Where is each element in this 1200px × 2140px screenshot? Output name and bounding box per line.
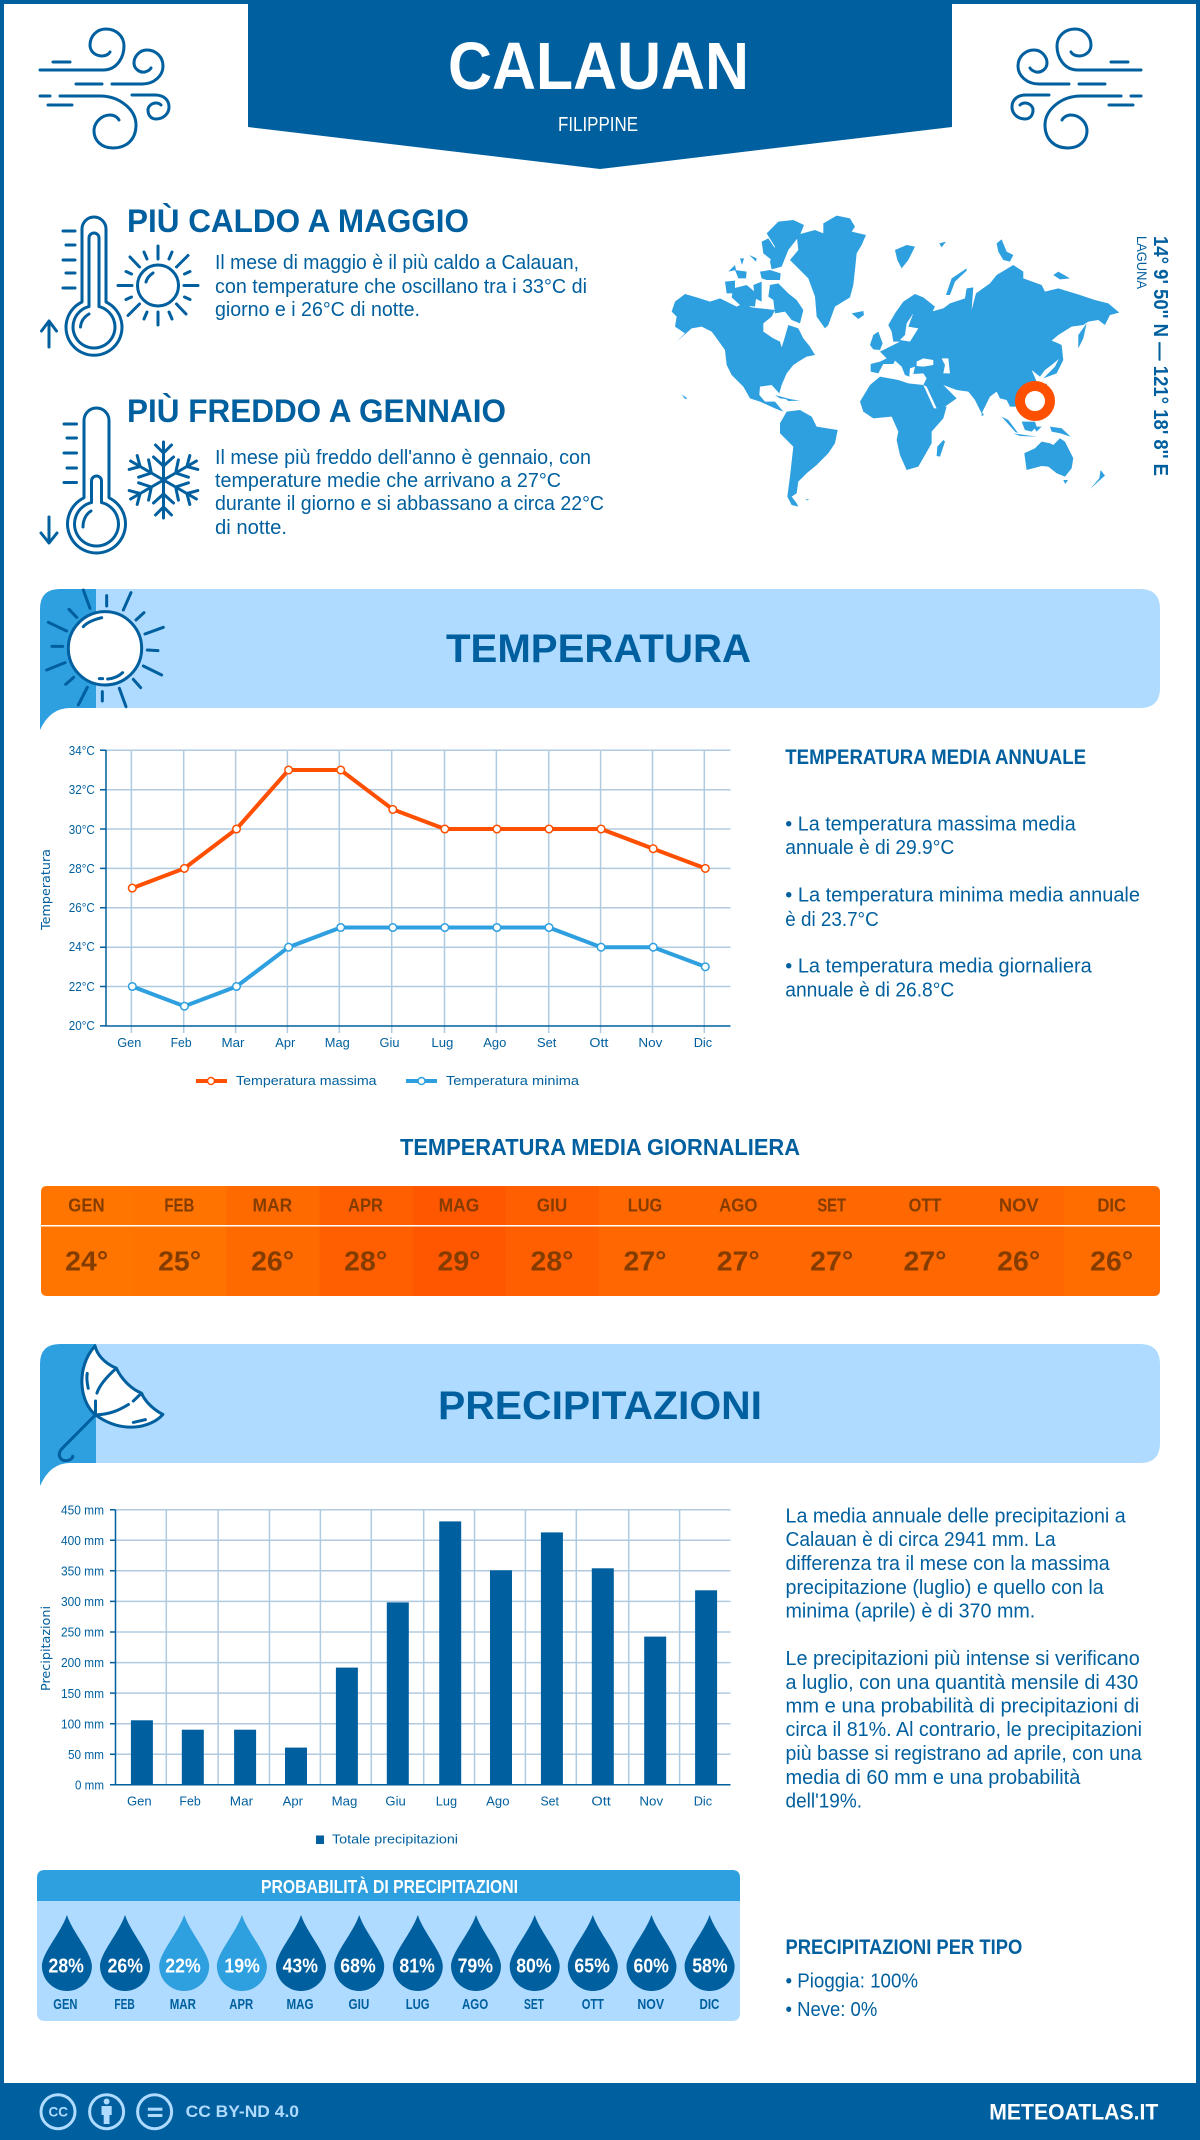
text block: precipitation description: differenza tra il mese con la massima (786, 1553, 1111, 1575)
text block: precipitation description (786, 1506, 1143, 1813)
icon: wind left (40, 29, 169, 148)
table value row: 26° (1090, 1246, 1133, 1277)
icon: creative commons: CC (48, 2104, 68, 2120)
text block: annual temperature: è di 23.7°C (785, 909, 879, 931)
probability values: 22% (165, 1956, 201, 1978)
y axis labels: 300 mm (61, 1594, 104, 1609)
text: hottest month: con temperature che oscillano tra i 33°C di (215, 276, 587, 298)
panel heading: PROBABILITÀ DI PRECIPITAZIONI (261, 1876, 518, 1897)
x axis labels: Feb (171, 1035, 192, 1050)
y axis labels: 400 mm (61, 1533, 104, 1548)
icon: cold thermometer (41, 408, 126, 553)
text block: annual temperature (785, 746, 1140, 1002)
text block: precipitation description: La media annuale delle precipitazioni a (786, 1506, 1127, 1528)
probability months: LUG (406, 1996, 430, 2013)
x axis labels: Gen (127, 1794, 152, 1808)
text: coldest month: temperature medie che arrivano a 27°C (215, 470, 561, 492)
x axis labels: Apr (283, 1794, 304, 1808)
panel: precipitation probability (37, 1870, 740, 2021)
table month row: DIC (1097, 1196, 1126, 1216)
probability values (48, 1956, 728, 1978)
table month row: AGO (719, 1196, 757, 1216)
text block: precipitation by type: • Neve: 0% (786, 1999, 877, 2021)
heading: hottest month: PIÙ CALDO A MAGGIO (127, 203, 469, 239)
x axis labels: Nov (639, 1794, 664, 1808)
probability values: 26% (108, 1956, 143, 1978)
table value row: 26° (997, 1246, 1040, 1277)
heading: temperature: TEMPERATURA (446, 627, 751, 671)
x axis labels: Mar (222, 1035, 245, 1050)
heading: precipitation by type: PRECIPITAZIONI PER TIPO (786, 1936, 1022, 1959)
bars (131, 1521, 717, 1785)
y axis labels: 50 mm (68, 1747, 104, 1762)
x axis labels: Mag (332, 1794, 357, 1808)
subtitle: FILIPPINE (558, 114, 638, 136)
icons: rain drops (42, 1915, 735, 1991)
text block: precipitation by type (786, 1936, 1022, 2021)
x axis labels: Apr (275, 1035, 296, 1050)
text block: precipitation by type: • Pioggia: 100% (786, 1970, 918, 1992)
panel: temperature header band (40, 589, 1160, 730)
table value row: 27° (810, 1246, 853, 1277)
probability values: 58% (692, 1956, 728, 1978)
chart legend: Temperatura massima (236, 1073, 377, 1088)
text block: annual temperature: • La temperatura massima media (785, 814, 1077, 836)
y axis labels: 100 mm (61, 1716, 104, 1732)
y axis labels: 250 mm (61, 1624, 104, 1640)
chart legend: Temperatura minima (446, 1073, 580, 1088)
site name: METEOATLAS.IT (989, 2099, 1159, 2124)
probability months: OTT (582, 1996, 604, 2013)
table: daily mean temperature (41, 1186, 1160, 1296)
chart legend: Totale precipitazioni (332, 1832, 458, 1846)
y axis labels: 22°C (69, 979, 95, 994)
coordinates: 14° 9' 50'' N — 121° 18' 8'' E (1149, 236, 1171, 476)
y axis labels: 28°C (69, 861, 95, 876)
x axis labels: Ago (486, 1794, 510, 1808)
x axis labels: Lug (436, 1794, 457, 1808)
table month row: MAR (253, 1196, 292, 1216)
probability values: 80% (516, 1956, 552, 1978)
probability months: GIU (348, 1996, 369, 2013)
y axis labels: 350 mm (61, 1564, 104, 1578)
table month row: SET (817, 1196, 846, 1216)
table value row (65, 1246, 1133, 1277)
world map (672, 216, 1119, 507)
x axis labels: Ago (483, 1035, 506, 1050)
x axis labels: Mag (325, 1035, 350, 1050)
probability months: APR (229, 1996, 253, 2013)
y axis labels: 24°C (69, 939, 95, 954)
x axis labels: Giu (380, 1035, 400, 1050)
y axis labels: 26°C (69, 900, 95, 915)
x axis labels: Ott (591, 1794, 611, 1808)
title: CALAUAN (448, 29, 749, 104)
icon: no derivatives (138, 2095, 172, 2129)
table month row (68, 1196, 1126, 1216)
header banner (248, 0, 952, 169)
x axis labels: Lug (431, 1035, 453, 1050)
probability months: NOV (637, 1996, 664, 2013)
probability values: 79% (458, 1956, 493, 1978)
table value row: 26° (251, 1246, 294, 1277)
icon: umbrella (59, 1346, 163, 1461)
table value row: 27° (624, 1246, 666, 1277)
y axis title: Temperatura (39, 849, 53, 931)
x axis labels: Nov (638, 1035, 663, 1050)
heading: coldest month: PIÙ FREDDO A GENNAIO (127, 393, 506, 429)
table value row: 27° (904, 1246, 946, 1277)
x axis labels (127, 1794, 713, 1808)
map marker (1020, 386, 1050, 416)
y axis labels: 0 mm (75, 1778, 104, 1792)
icon: attribution (90, 2095, 124, 2129)
table month row: LUG (628, 1196, 662, 1216)
line chart: temperature (39, 743, 730, 1088)
text block: annual temperature: • La temperatura media giornaliera (785, 956, 1093, 978)
x axis labels: Feb (179, 1794, 201, 1808)
x axis labels: Dic (694, 1035, 713, 1050)
x axis labels: Mar (230, 1794, 254, 1808)
text block: precipitation description: media di 60 mm e una probabilità (786, 1767, 1081, 1789)
table value row: 27° (717, 1246, 760, 1277)
x axis labels (117, 1035, 713, 1050)
y axis labels: 20°C (69, 1018, 95, 1033)
icon: sun (47, 590, 163, 707)
region label: LAGUNA (1134, 236, 1150, 290)
probability values: 43% (283, 1956, 318, 1978)
y axis labels: 200 mm (61, 1655, 104, 1670)
x axis labels: Giu (385, 1794, 406, 1808)
text block: annual temperature: annuale è di 26.8°C (785, 980, 954, 1002)
text block: precipitation description: precipitazione (luglio) e quello con la (786, 1577, 1105, 1599)
text block: annual temperature: annuale è di 29.9°C (785, 837, 954, 859)
text block: precipitation description: minima (aprile) è di 370 mm. (786, 1601, 1035, 1623)
table month row: NOV (999, 1196, 1039, 1216)
table value row: 28° (530, 1246, 574, 1277)
y axis labels: 450 mm (61, 1502, 104, 1518)
probability values: 19% (224, 1956, 260, 1978)
table month row: OTT (909, 1196, 941, 1216)
y axis labels: 150 mm (61, 1686, 104, 1701)
icon: snowflake (126, 442, 201, 518)
probability months: AGO (462, 1996, 488, 2013)
text block: precipitation description: Le precipitazioni più intense si verificano (786, 1648, 1140, 1670)
table value row: 25° (158, 1246, 201, 1277)
table month row: GEN (68, 1196, 105, 1216)
table month row: GIU (537, 1196, 567, 1216)
table value row: 29° (438, 1246, 480, 1277)
y axis labels: 34°C (69, 743, 95, 758)
probability values: 28% (48, 1956, 84, 1978)
probability months: DIC (700, 1996, 720, 2013)
chart legend (196, 1073, 580, 1088)
probability months: SET (524, 1996, 544, 2013)
text: coldest month: Il mese più freddo dell'anno è gennaio, con (215, 447, 591, 469)
probability months: MAG (286, 1996, 314, 2013)
x axis labels: Set (540, 1794, 559, 1808)
footer (0, 2083, 1200, 2140)
heading: daily mean temperature: TEMPERATURA MEDIA GIORNALIERA (400, 1134, 800, 1160)
table value row: 28° (344, 1246, 387, 1277)
series: minimum temperature (128, 924, 709, 1010)
probability months: FEB (114, 1996, 135, 2013)
x axis labels: Ott (589, 1035, 609, 1050)
text: hottest month: giorno e i 26°C di notte. (215, 299, 420, 321)
probability values: 68% (340, 1956, 376, 1978)
y axis labels: 30°C (69, 822, 95, 837)
text block: precipitation description: più basse si registrano ad aprile, con una (786, 1743, 1143, 1765)
text: coldest month (215, 447, 604, 539)
text block: annual temperature: • La temperatura minima media annuale (785, 885, 1140, 907)
y axis labels: 32°C (69, 782, 95, 797)
x axis labels: Set (537, 1035, 557, 1050)
text: hottest month (215, 252, 587, 321)
table month row: MAG (439, 1196, 479, 1216)
probability months: MAR (170, 1996, 196, 2013)
bar chart: precipitation (39, 1502, 730, 1846)
license text: CC BY-ND 4.0 (186, 2102, 299, 2121)
y axis labels (61, 1502, 104, 1792)
probability values: 65% (574, 1956, 610, 1978)
icon: sun (118, 246, 198, 325)
text block: precipitation description: Calauan è di circa 2941 mm. La (786, 1529, 1057, 1551)
table month row: APR (348, 1196, 383, 1216)
series: maximum temperature (128, 766, 709, 892)
icon: wind right (1012, 29, 1141, 148)
text: coldest month: durante il giorno e si abbassano a circa 22°C (215, 493, 604, 515)
y axis labels (69, 743, 95, 1033)
text block: precipitation description: dell'19%. (786, 1791, 862, 1813)
text: coldest month: di notte. (215, 517, 287, 539)
icon: creative commons (41, 2095, 75, 2129)
x axis labels: Gen (117, 1035, 141, 1050)
table value row: 24° (65, 1246, 108, 1277)
probability values: 81% (399, 1956, 435, 1978)
table month row: FEB (164, 1196, 194, 1216)
icon: hot thermometer (42, 217, 122, 355)
text block: precipitation description: circa il 81%. Al contrario, le precipitazioni (786, 1719, 1142, 1741)
text: hottest month: Il mese di maggio è il più caldo a Calauan, (215, 252, 579, 274)
text block: precipitation description: a luglio, con una quantità mensile di 430 (786, 1672, 1138, 1694)
probability values: 60% (634, 1956, 669, 1978)
probability months: GEN (53, 1996, 78, 2013)
panel: precipitation header band (40, 1344, 1160, 1486)
x axis labels: Dic (694, 1794, 713, 1808)
heading: annual temperature: TEMPERATURA MEDIA ANNUALE (785, 746, 1086, 769)
text block: precipitation description: mm e una probabilità di precipitazioni di (786, 1696, 1139, 1718)
probability months (53, 1996, 720, 2013)
heading: precipitation: PRECIPITAZIONI (438, 1384, 762, 1428)
y axis title: Precipitazioni (39, 1606, 53, 1691)
